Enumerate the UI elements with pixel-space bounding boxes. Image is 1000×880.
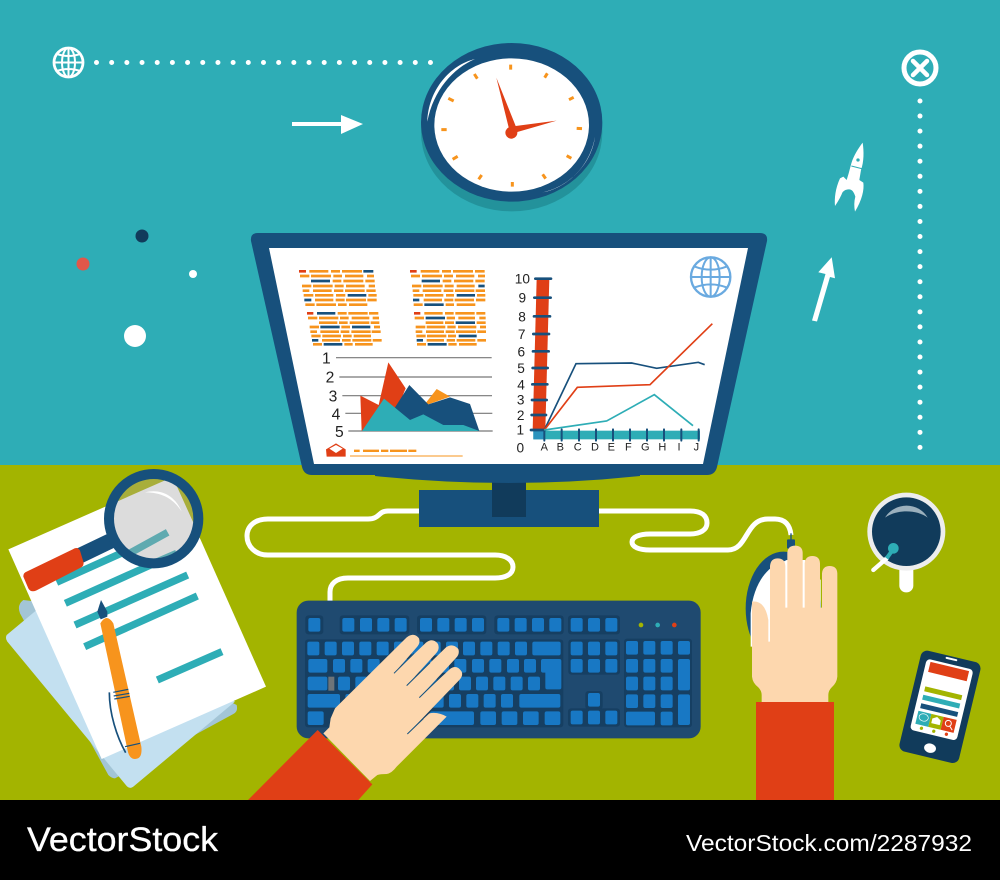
coffee cup (867, 493, 945, 592)
sleeve (756, 702, 834, 800)
axis letters: J (694, 442, 699, 454)
axis letters: C (574, 442, 582, 454)
documents (6, 477, 266, 788)
monitor frame (251, 233, 767, 483)
axis letters: H (658, 442, 666, 454)
mouse (746, 533, 821, 665)
axis numbers: 2 (517, 408, 524, 423)
keys (307, 618, 690, 725)
pen (97, 600, 142, 759)
chart axis numbers: 4 (332, 406, 341, 423)
chart axis numbers: 5 (335, 424, 344, 441)
axis numbers: 5 (517, 361, 525, 376)
axis letters: E (608, 442, 615, 454)
watermark: image url: VectorStock.com/2287932 (686, 830, 972, 856)
axis letters: A (541, 442, 549, 454)
axis numbers: 6 (518, 344, 525, 359)
axis letters: F (625, 442, 632, 454)
axis letters (541, 442, 699, 454)
axis numbers: 9 (519, 291, 526, 306)
line chart (515, 271, 712, 455)
right hand (752, 546, 837, 703)
axis letters: D (591, 442, 599, 454)
hand (323, 635, 462, 781)
monitor screen (269, 248, 748, 464)
icon: envelope and footer lines (326, 443, 463, 457)
mouse and right hand (746, 533, 837, 800)
axis numbers: 4 (517, 377, 525, 392)
dotted line: vertical (918, 101, 922, 450)
axis letters: B (557, 442, 564, 454)
arrow: pointing up (812, 257, 835, 322)
axis letters: I (677, 442, 681, 454)
indicator lights (639, 623, 677, 627)
axis numbers: 8 (518, 309, 526, 324)
sleeve (248, 730, 372, 800)
decorative dots (76, 230, 197, 347)
axis numbers: 1 (517, 423, 524, 438)
icon: globe top left (54, 48, 83, 77)
monitor (251, 233, 767, 527)
icon: rocket (835, 143, 864, 212)
text blocks on screen (299, 271, 486, 344)
axis numbers (515, 271, 530, 455)
app icons (915, 711, 957, 733)
area chart (322, 350, 493, 441)
arrow: pointing to clock (292, 115, 363, 134)
clock (421, 43, 602, 211)
cable: monitor to keyboard (247, 511, 513, 601)
smartphone (898, 649, 982, 764)
axis numbers: 10 (515, 271, 530, 286)
chart axis numbers: 1 (322, 350, 331, 367)
watermark: brand name: VectorStock (27, 821, 219, 859)
icon: close circle (904, 52, 936, 84)
cable: monitor to mouse (599, 511, 791, 550)
icon: globe on screen (691, 257, 730, 297)
axis numbers: 0 (517, 440, 525, 455)
axis letters: G (641, 442, 650, 454)
left hand and sleeve (248, 635, 462, 800)
back sheet (19, 600, 237, 778)
magnifying glass (23, 460, 207, 591)
keyboard (297, 601, 701, 738)
middle sheet (6, 610, 235, 788)
chart axis numbers: 2 (326, 370, 334, 387)
chart axis numbers: 3 (329, 388, 338, 405)
chart axis numbers (322, 350, 344, 441)
axis numbers: 3 (517, 393, 524, 408)
dotted line: horizontal (96, 60, 431, 65)
monitor stand (419, 470, 599, 527)
text lines (57, 532, 222, 680)
key group backgrounds (305, 615, 692, 727)
front sheet (8, 477, 266, 759)
axis numbers: 7 (518, 327, 525, 342)
